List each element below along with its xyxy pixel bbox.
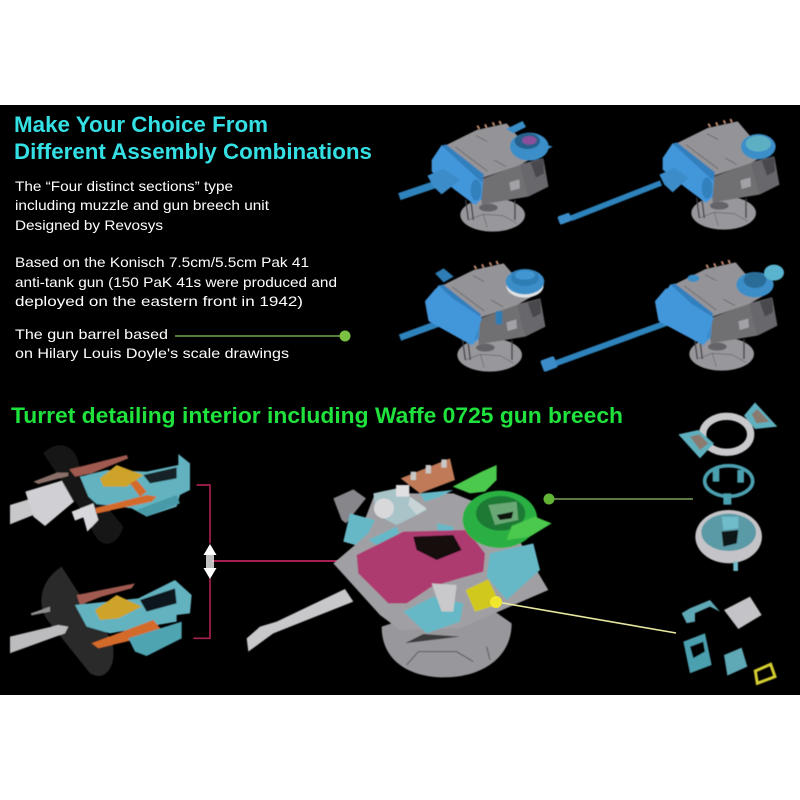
teal frame bbox=[683, 633, 712, 673]
gun sight: yellow bbox=[466, 579, 496, 612]
teal block bbox=[724, 648, 747, 676]
mantlet four bbox=[657, 290, 712, 343]
cupola one bbox=[506, 121, 553, 161]
text block: Pak 41 basis: deployed on the eastern front in 1942) bbox=[15, 293, 303, 309]
mantlet one bbox=[427, 169, 460, 194]
stowage three bbox=[435, 268, 454, 282]
cupola highlight: green bbox=[453, 465, 552, 548]
gun breech highlight: magenta bbox=[357, 530, 485, 603]
cupola three bbox=[506, 269, 544, 298]
icon: double arrow bbox=[204, 544, 216, 579]
breech assembly lower bbox=[10, 567, 192, 676]
gun barrel one bbox=[399, 184, 437, 197]
left hatch bbox=[678, 430, 714, 458]
mantlet two bbox=[659, 168, 688, 192]
hatch four bbox=[687, 275, 699, 282]
callout: green leader line bbox=[544, 494, 693, 504]
cupola two bbox=[741, 134, 776, 159]
text block: four distinct sections: The “Four distinct sections” type bbox=[15, 178, 233, 194]
central turret cutaway bbox=[247, 458, 552, 677]
small bracket bbox=[682, 600, 720, 623]
yellow frame bbox=[755, 664, 775, 683]
small grey parts bbox=[432, 583, 457, 612]
vision port three bbox=[496, 311, 502, 324]
heading: turret detailing: Turret detailing interior including Waffe 0725 gun breech bbox=[11, 403, 623, 428]
turret: variant two bbox=[557, 119, 779, 230]
turret floor bbox=[333, 493, 548, 630]
heading: assembly combinations: Different Assembly Combinations bbox=[14, 139, 372, 164]
text block: Pak 41 basis: Based on the Konisch 7.5cm/5.5cm Pak 41 bbox=[15, 254, 309, 270]
mantlet three bbox=[427, 290, 480, 343]
black panel background bbox=[0, 105, 800, 695]
heading: assembly combinations: Make Your Choice From bbox=[14, 112, 268, 137]
bracket: pink connector bbox=[193, 485, 210, 638]
turret: variant one bbox=[399, 121, 553, 232]
turret basket base bbox=[382, 597, 512, 677]
text block: Pak 41 basis bbox=[15, 254, 337, 309]
heading: assembly combinations bbox=[14, 112, 372, 164]
connector: pink leader line bbox=[212, 554, 354, 566]
turret: variant four bbox=[540, 260, 784, 372]
callout: barrel leader line bbox=[175, 330, 350, 342]
callout: yellow leader line bbox=[490, 596, 676, 633]
right hatch bbox=[744, 402, 777, 429]
gun barrel four bbox=[540, 322, 670, 372]
text block: gun barrel drawings: The gun barrel based bbox=[15, 326, 168, 342]
exploded parts bbox=[678, 402, 777, 683]
mount ring bbox=[705, 466, 753, 505]
text block: gun barrel drawings: on Hilary Louis Doyle's scale drawings bbox=[15, 345, 289, 361]
cupola four bbox=[736, 265, 784, 297]
text block: four distinct sections bbox=[15, 178, 269, 233]
gun barrel two bbox=[557, 183, 661, 225]
ring bbox=[703, 416, 751, 452]
grey plate bbox=[724, 597, 762, 629]
teal interior parts bbox=[343, 490, 540, 633]
text block: gun barrel drawings bbox=[15, 326, 289, 361]
breech assembly upper bbox=[10, 445, 190, 544]
text block: four distinct sections: including muzzle and gun breech unit bbox=[15, 197, 269, 213]
rear fittings bbox=[333, 458, 455, 525]
gun barrel bbox=[247, 589, 353, 652]
cupola base bbox=[695, 510, 762, 571]
text block: four distinct sections: Designed by Revosys bbox=[15, 217, 163, 233]
text block: Pak 41 basis: anti-tank gun (150 PaK 41s were produced and bbox=[15, 274, 337, 290]
gun breech assemblies bbox=[10, 445, 210, 676]
turret: variant three bbox=[400, 261, 545, 372]
gun barrel three bbox=[400, 322, 442, 338]
